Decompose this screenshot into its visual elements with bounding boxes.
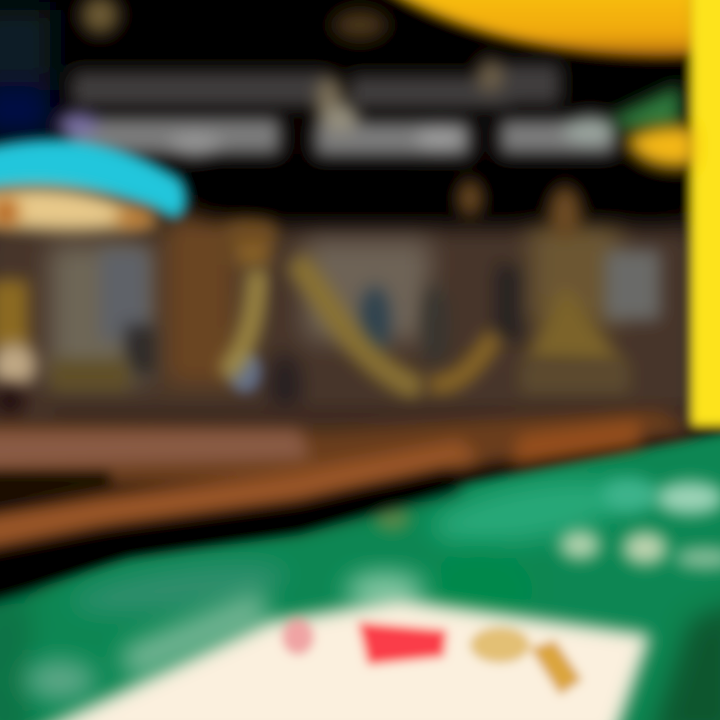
heading: illegible blurred title, line one (72, 59, 560, 124)
panel: green felt table (0, 432, 720, 720)
icon: gold chips (470, 627, 582, 695)
icon: yellow arc at top (375, 0, 695, 56)
amber glow along the cabinet tops (222, 180, 581, 244)
icon: red suit marks (282, 619, 447, 665)
icon: green accent beside the heading (610, 85, 680, 130)
icon: ceiling lights (82, 0, 386, 39)
panel: glass cabinets behind the table (0, 215, 690, 427)
panel: white playing card (20, 600, 650, 720)
panel: wooden table rail (0, 410, 690, 605)
icon: turquoise lamp shade (0, 140, 185, 231)
heading: illegible blurred title, line two (58, 104, 616, 157)
dark band above the cabinets (200, 170, 680, 215)
icon: yellow vertical bar (625, 0, 720, 425)
